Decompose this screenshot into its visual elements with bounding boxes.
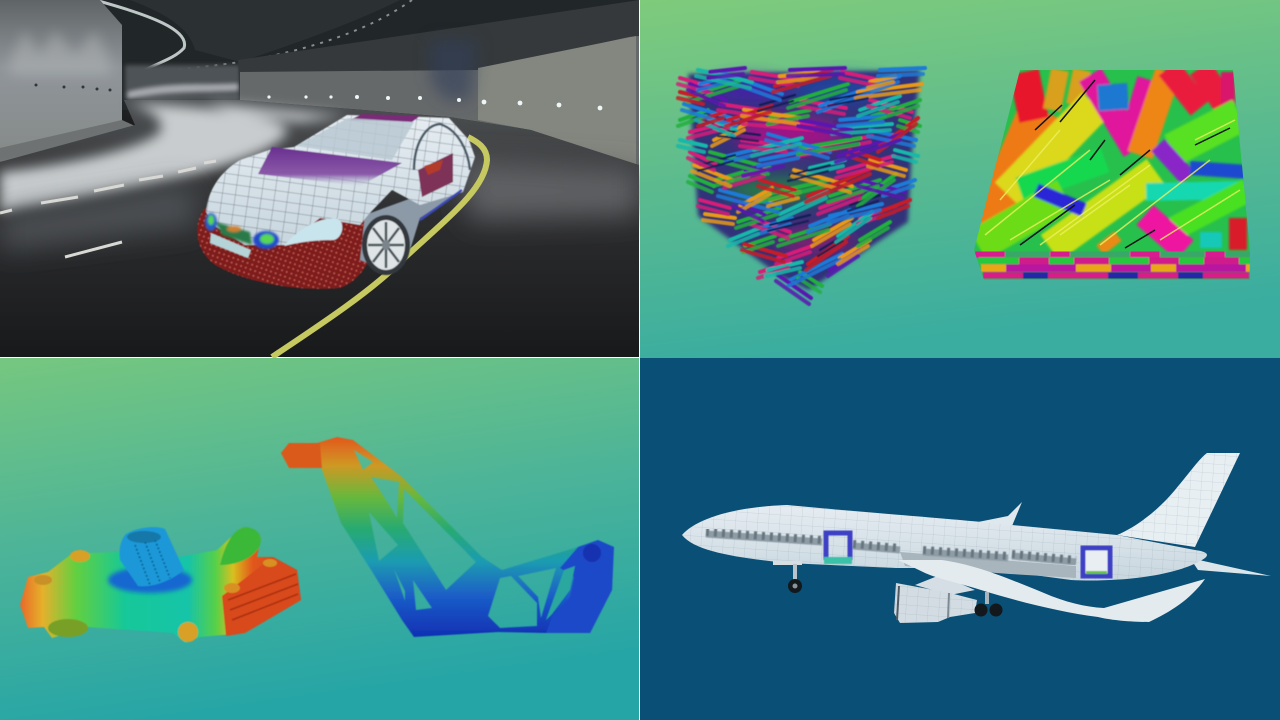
blue patch top [1098,96,1128,98]
fuselage [682,505,1207,580]
cabin seats row [706,532,1076,562]
orange band [985,110,1040,240]
stabilizer [1190,558,1271,576]
purple and blue middle right [1158,145,1188,178]
green rear lobe [220,527,261,565]
wall lights [267,95,602,110]
cyan bottom right [1200,232,1222,248]
magenta bottom [1145,215,1185,250]
fiber streaks [985,80,1240,248]
blue patch middle [1036,190,1084,210]
headlight [284,219,342,246]
front wheel [362,215,410,275]
main landing gear [974,592,1002,616]
car model [197,114,475,289]
door panel [418,153,453,197]
blue frame section rear [1083,548,1110,576]
yellow road line [272,137,487,357]
layered edge stripes [975,254,1250,276]
left fiber cluster [678,68,925,304]
road glare right [0,160,639,250]
orange stripe [1140,72,1168,155]
distant tunnel opening [125,65,240,100]
tunnel ceiling [0,0,639,110]
roof panel [350,114,420,122]
left tunnel wall [0,0,135,162]
road surface [0,100,639,357]
bolts [34,550,277,642]
lime top right [1172,115,1240,150]
yellow diagonal [1008,105,1095,195]
orange inlet tube [281,443,322,468]
engine [894,583,977,623]
windshield [296,118,414,160]
car body mesh [206,115,475,245]
round boss [583,544,601,562]
orange bottom spot [1100,236,1118,250]
red top left strip [1024,72,1034,120]
magenta top right corner [1221,72,1235,112]
end cap opening [546,566,575,620]
engine pylon [915,575,975,595]
second fiber layer [678,74,923,304]
rear tail fin [1117,453,1240,547]
right fiber block [974,68,1250,280]
car underside shadow [360,190,462,270]
lane markings [0,161,216,257]
magenta stripe [1090,75,1150,150]
lime bottom left [978,195,1065,245]
side blue sill [420,190,462,220]
license plate [210,233,251,258]
panel: car in tunnel [0,0,639,357]
lime right bottom [1175,190,1248,228]
red corner block [222,557,301,636]
raised column [119,527,184,586]
panel: fiber simulations [640,0,1280,358]
door highlight [424,160,443,175]
red lower mesh [197,205,372,289]
red bottom right [1229,218,1247,250]
green middle left [1020,160,1105,190]
cyan right [1146,190,1240,192]
thermal baseplate part [20,527,301,643]
topology-optimised bracket [281,437,614,637]
yellow top strip [1052,70,1082,110]
blue frame section front [824,533,852,564]
yellow centre diagonal [1050,172,1156,248]
lower cargo band [900,552,1076,578]
panel: heat-map parts [0,358,639,720]
panel: airplane [640,358,1280,720]
far wing [978,502,1022,526]
red top right [1168,68,1225,108]
central blue glow [108,567,192,593]
column ridges [135,540,170,585]
door pillar loop [414,124,470,170]
main wing [898,560,1205,622]
right tunnel wall [238,0,639,165]
nose landing gear [773,563,802,593]
hood panel [258,147,402,186]
blue end cap [546,540,614,633]
road light glare [0,102,345,213]
bumper heat spots [205,213,279,249]
